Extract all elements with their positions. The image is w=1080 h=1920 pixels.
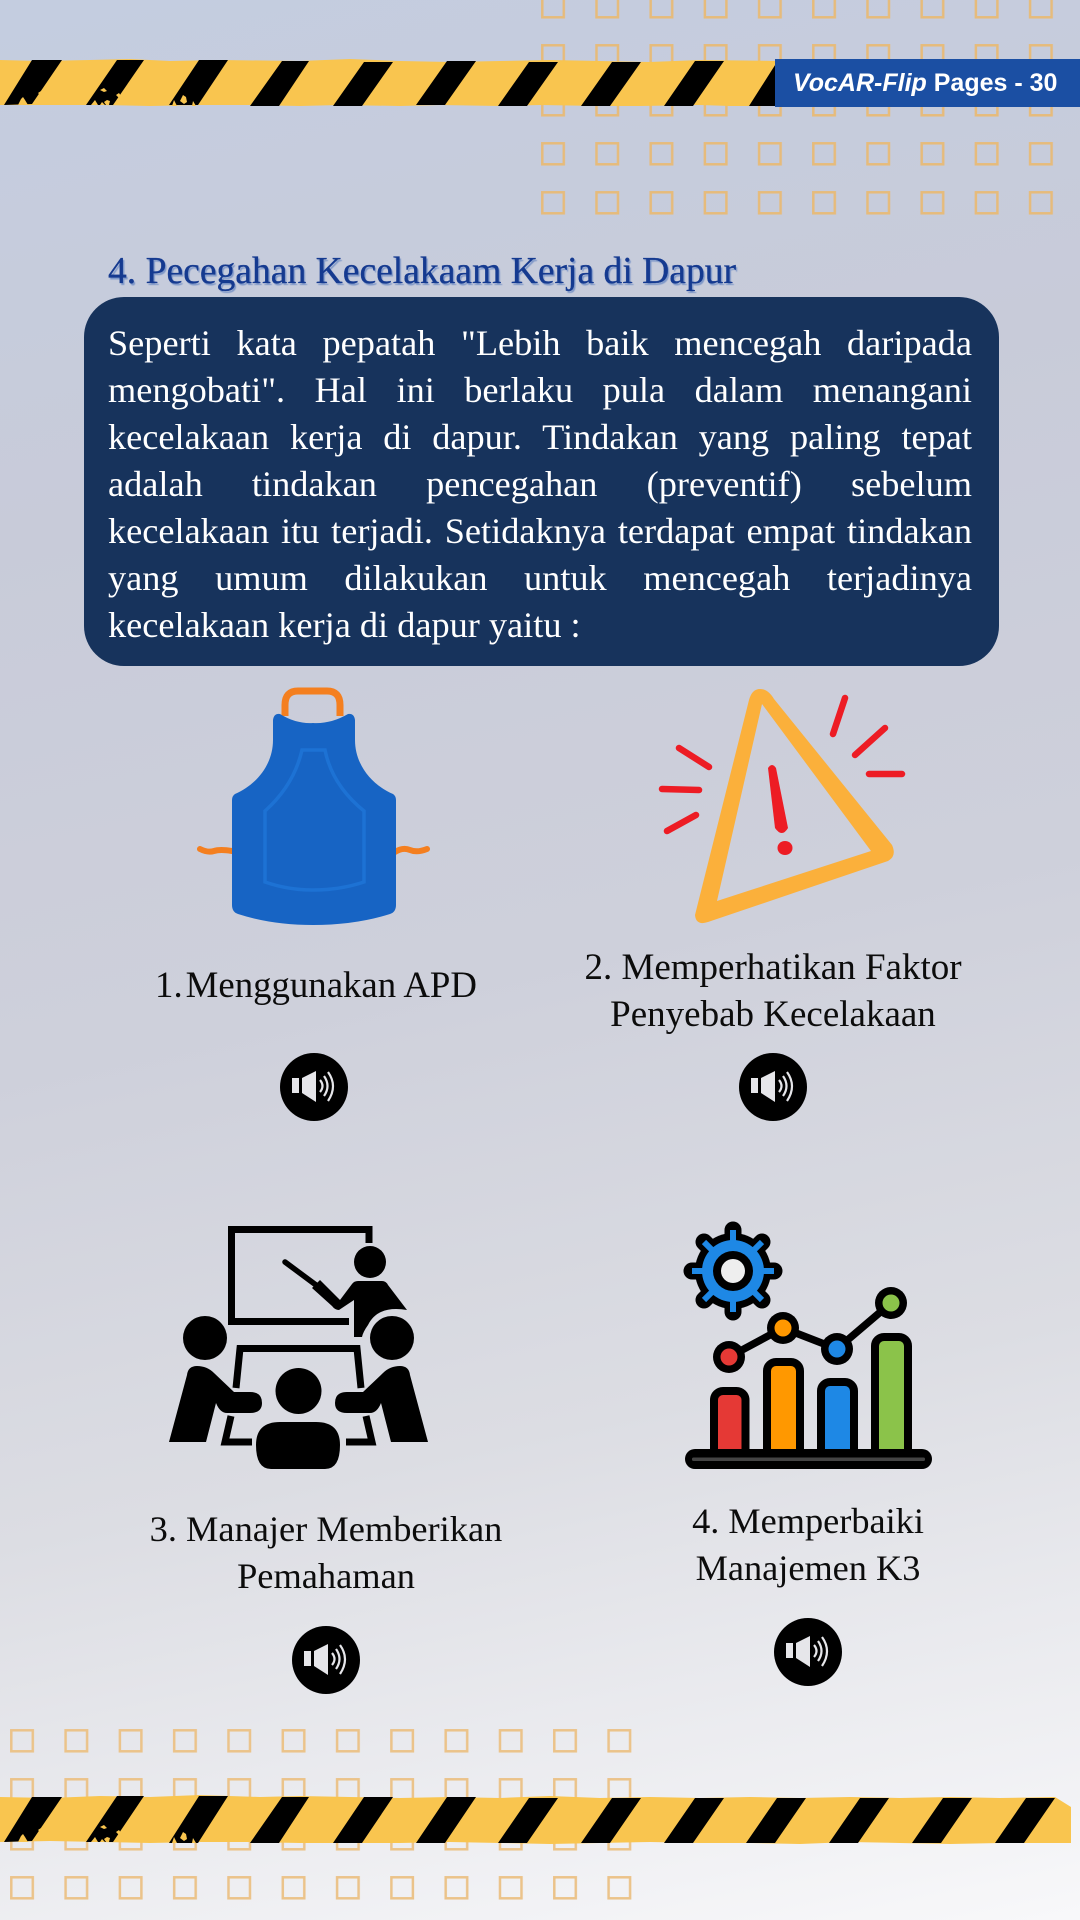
icon: warning triangle [662, 689, 902, 923]
label 2: 2. Memperhatikan Faktor [584, 947, 962, 988]
label 3: 3. Manajer Memberikan [150, 1509, 502, 1549]
bottom hazard stripe [0, 1795, 1071, 1844]
icon: speaker 1 [280, 1053, 348, 1121]
label 2: Penyebab Kecelakaan [610, 994, 936, 1035]
worn marks on bottom stripes [18, 1825, 196, 1843]
icon: speaker 3 [292, 1626, 360, 1694]
intro text [108, 323, 972, 645]
icon: meeting presentation [169, 1230, 428, 1469]
intro panel [84, 297, 999, 666]
bottom square pattern [10, 1729, 632, 1900]
top square pattern [541, 0, 1054, 215]
intro text: mengobati". Hal ini berlaku pula dalam menangani [108, 370, 972, 410]
intro text: adalah tindakan pencegahan (preventif) sebelum [108, 464, 972, 504]
heading: 4. Pecegahan Kecelakaam Kerja di Dapur [108, 250, 736, 292]
label 3 [150, 1509, 502, 1596]
label 4 [692, 1501, 924, 1588]
label 3: Pemahaman [237, 1556, 415, 1596]
page badge: VocAR-Flip Pages - 30 [793, 69, 1057, 97]
label 2 [584, 947, 962, 1035]
icon: apron [200, 691, 427, 925]
label 4: Manajemen K3 [696, 1548, 920, 1588]
intro text: Seperti kata pepatah "Lebih baik mencegah daripada [108, 323, 972, 363]
icon: chart and gear [685, 1230, 932, 1469]
label 4: 4. Memperbaiki [692, 1501, 924, 1541]
page badge [775, 59, 1080, 107]
intro text: kecelakaan kerja di dapur yaitu : [108, 605, 581, 645]
intro text: yang umum dilakukan untuk mencegah terjadinya [108, 558, 972, 598]
intro text: kecelakaan kerja di dapur. Tindakan yang paling tepat [108, 417, 972, 457]
icon: speaker 2 [739, 1053, 807, 1121]
top hazard stripe [0, 59, 775, 106]
worn marks on stripes [18, 88, 196, 106]
label 1: 1.Menggunakan APD [155, 964, 477, 1005]
intro text: kecelakaan itu terjadi. Setidaknya terdapat empat tindakan [108, 511, 972, 551]
icon: speaker 4 [774, 1618, 842, 1686]
